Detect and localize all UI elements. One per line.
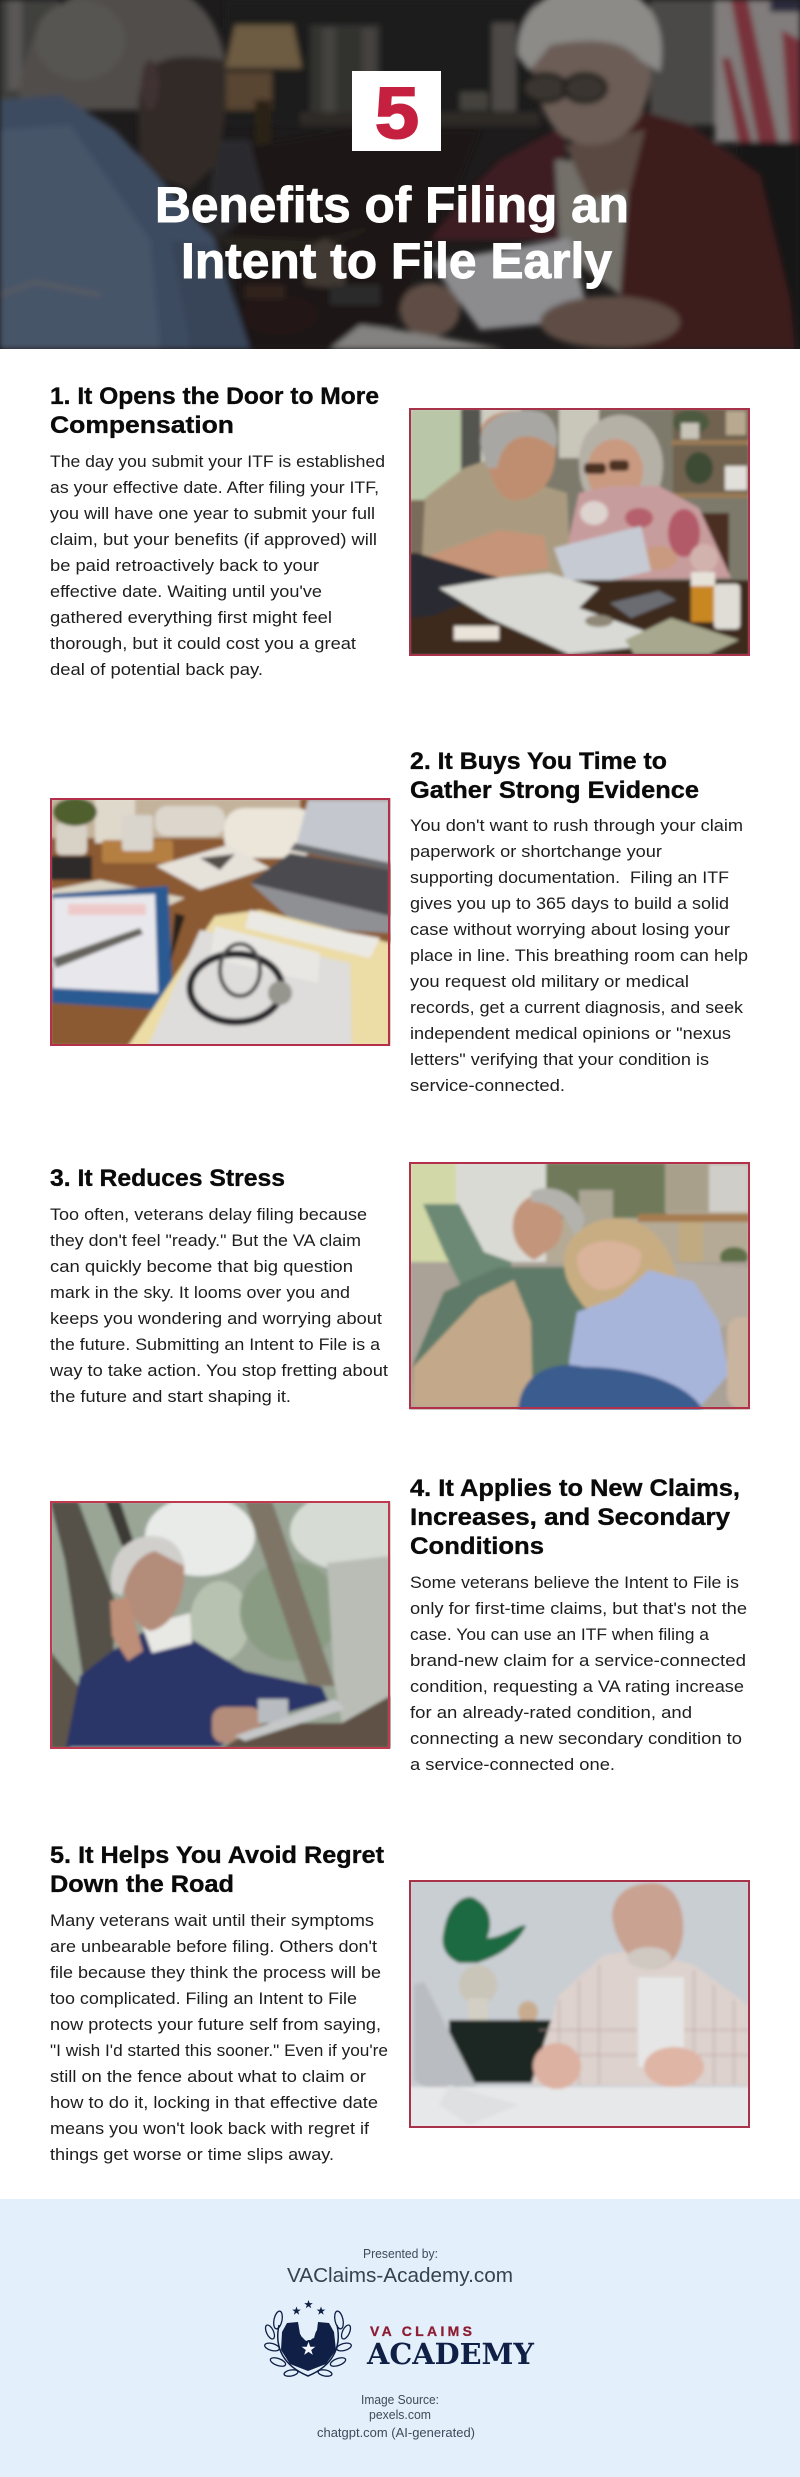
- body text: benefit 2: letters" verifying that your condition is: [410, 1050, 709, 1069]
- heading: benefit 5: 5. It Helps You Avoid Regret: [50, 1842, 384, 1869]
- panel: benefit 4: [50, 1475, 747, 1774]
- body text: benefit 5: file because they think the process will be: [50, 1963, 381, 1982]
- hero banner: [0, 0, 800, 349]
- body text: benefit 4: for an already-rated condition, and: [410, 1703, 692, 1722]
- body text: benefit 2: service-connected.: [410, 1076, 565, 1095]
- body text: benefit 1: effective date. Waiting until you've: [50, 582, 322, 601]
- body text: benefit 3: the future and start shaping it.: [50, 1387, 291, 1406]
- body text: benefit 2: You don't want to rush through your claim: [410, 816, 743, 835]
- body text: benefit 4: brand-new claim for a service-connected: [410, 1651, 746, 1670]
- hero photo: veteran and advisor at desk: [0, 0, 800, 349]
- website address: VAClaims-Academy.com: [287, 2265, 513, 2287]
- body text: benefit 2: records, get a current diagnosis, and seek: [410, 998, 744, 1017]
- body text: benefit 4: [410, 1573, 747, 1774]
- body text: benefit 5: still on the fence about what to claim or: [50, 2067, 366, 2086]
- body text: benefit 4: connecting a new secondary condition to: [410, 1729, 742, 1748]
- body text: benefit 2: gives you up to 365 days to build a solid: [410, 894, 729, 913]
- icon: eagle crest with wreath: [264, 2300, 352, 2377]
- body text: benefit 2: paperwork or shortchange your: [410, 842, 662, 861]
- image source credits: pexels.com: [369, 2408, 431, 2422]
- heading: benefit 4: Conditions: [410, 1533, 544, 1560]
- body text: benefit 5: things get worse or time slips away.: [50, 2145, 334, 2164]
- heading: benefit 2: [410, 748, 699, 804]
- body text: benefit 1: as your effective date. After filing your ITF,: [50, 478, 379, 497]
- body text: benefit 1: thorough, but it could cost you a great: [50, 634, 356, 653]
- panel: benefit 1: [50, 383, 750, 679]
- body text: benefit 1: gathered everything first might feel: [50, 608, 332, 627]
- body text: benefit 1: deal of potential back pay.: [50, 660, 263, 679]
- logo wordmark: ACADEMY: ACADEMY: [366, 2337, 534, 2371]
- body text: benefit 3: way to take action. You stop fretting about: [49, 1361, 388, 1380]
- title: [155, 177, 629, 289]
- heading: benefit 4: [410, 1475, 740, 1560]
- body text: benefit 4: only for first-time claims, but that's not the: [410, 1599, 747, 1618]
- body text: benefit 2: place in line. This breathing room can help: [410, 946, 748, 965]
- photo: older man reviewing paperwork: [409, 1880, 750, 2128]
- body text: benefit 4: condition, requesting a VA rating increase: [410, 1677, 744, 1696]
- body text: benefit 4: case. You can use an ITF when filing a: [410, 1625, 710, 1644]
- body text: benefit 5: how to do it, locking in that effective date: [50, 2093, 378, 2112]
- body text: benefit 3: mark in the sky. It looms over you and: [50, 1283, 350, 1302]
- presented by label: Presented by:: [363, 2247, 438, 2261]
- body text: benefit 4: a service-connected one.: [410, 1755, 615, 1774]
- body text: benefit 4: Some veterans believe the Intent to File is: [410, 1573, 739, 1592]
- footer panel: [0, 2199, 800, 2477]
- photo: man on the phone at laptop: [50, 1491, 410, 1749]
- body text: benefit 5: too complicated. Filing an Intent to File: [50, 1989, 357, 2008]
- heading: benefit 1: Compensation: [50, 412, 234, 439]
- body text: benefit 1: you will have one year to submit your full: [50, 504, 375, 523]
- image source credits: Image Source:: [361, 2393, 439, 2407]
- title: Benefits of Filing an: [155, 177, 629, 233]
- heading: benefit 4: 4. It Applies to New Claims,: [410, 1475, 740, 1502]
- logo: VA Claims Academy: [264, 2300, 534, 2377]
- photo: relaxed couple on sofa: [409, 1162, 757, 1410]
- heading: benefit 1: [50, 383, 379, 439]
- title: Intent to File Early: [181, 233, 612, 289]
- heading: benefit 3: 3. It Reduces Stress: [50, 1165, 285, 1192]
- body text: benefit 5: are unbearable before filing. Others don't: [50, 1937, 377, 1956]
- body text: benefit 5: Many veterans wait until their symptoms: [50, 1911, 374, 1930]
- body text: benefit 3: [49, 1205, 388, 1406]
- body text: benefit 1: The day you submit your ITF is established: [50, 452, 385, 471]
- panel: benefit 5: [50, 1842, 750, 2164]
- image source credits: [317, 2393, 475, 2440]
- heading: benefit 2: 2. It Buys You Time to: [410, 748, 667, 775]
- image source credits: chatgpt.com (AI-generated): [317, 2426, 475, 2440]
- body text: benefit 2: [410, 816, 748, 1095]
- heading: benefit 2: Gather Strong Evidence: [410, 777, 699, 804]
- body text: benefit 3: can quickly become that big question: [50, 1257, 353, 1276]
- body text: benefit 3: the future. Submitting an Intent to File is a: [50, 1335, 381, 1354]
- panel: benefit 2: [50, 748, 748, 1095]
- body text: benefit 2: supporting documentation. Filing an ITF: [410, 868, 729, 887]
- body text: benefit 2: case without worrying about losing your: [410, 920, 730, 939]
- heading: benefit 4: Increases, and Secondary: [410, 1504, 730, 1531]
- body text: benefit 5: now protects your future self from saying,: [50, 2015, 381, 2034]
- heading: benefit 5: Down the Road: [50, 1871, 234, 1898]
- panel: benefit 3: [49, 1162, 757, 1410]
- body text: benefit 5: means you won't look back with regret if: [50, 2119, 369, 2138]
- heading: benefit 1: 1. It Opens the Door to More: [50, 383, 379, 410]
- body text: benefit 3: keeps you wondering and worrying about: [50, 1309, 382, 1328]
- number badge: 5: 5: [375, 74, 419, 154]
- body text: benefit 2: independent medical opinions or "nexus: [410, 1024, 731, 1043]
- body text: benefit 3: Too often, veterans delay filing because: [50, 1205, 367, 1224]
- body text: benefit 5: "I wish I'd started this sooner." Even if you're: [50, 2041, 388, 2060]
- body text: benefit 5: [50, 1911, 388, 2164]
- logo wordmark: VA CLAIMS: VA CLAIMS: [370, 2323, 472, 2339]
- body text: benefit 1: [50, 452, 385, 679]
- number badge: 5: [352, 71, 441, 154]
- body text: benefit 1: claim, but your benefits (if approved) will: [50, 530, 377, 549]
- body text: benefit 2: you request old military or medical: [410, 972, 689, 991]
- body text: benefit 3: they don't feel "ready." But the VA claim: [50, 1231, 361, 1250]
- photo: medical records and stethoscope on desk: [50, 798, 391, 1046]
- photo: couple reviewing papers at table: [409, 408, 750, 656]
- heading: benefit 5: [50, 1842, 384, 1898]
- body text: benefit 1: be paid retroactively back to your: [50, 556, 319, 575]
